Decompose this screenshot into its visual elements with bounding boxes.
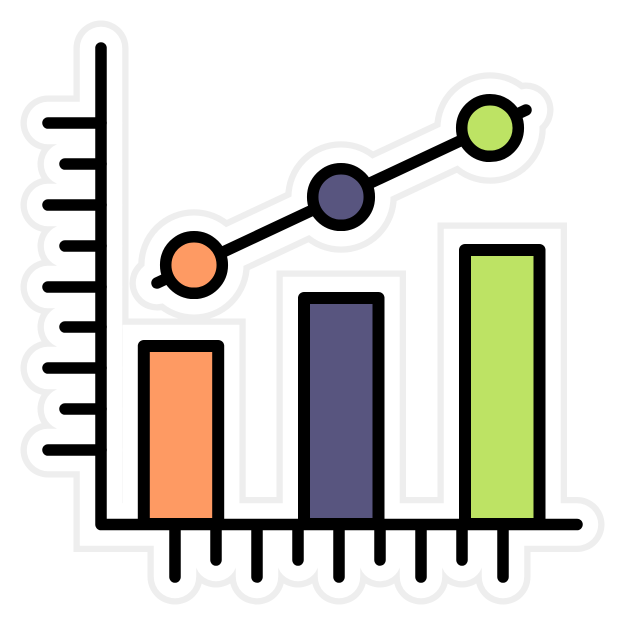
marker: orange (166, 237, 222, 293)
bar: purple (304, 298, 378, 524)
bar: green (465, 250, 540, 524)
bar: orange (144, 346, 218, 524)
axes with tick marks (48, 48, 577, 577)
trend line (157, 110, 526, 283)
marker: green (462, 100, 518, 156)
y axis ticks (48, 123, 101, 450)
bar chart (144, 250, 540, 524)
axis lines (101, 48, 577, 524)
marker: purple (313, 169, 369, 225)
trend line with markers (157, 100, 526, 293)
sticker outline (48, 48, 577, 577)
x axis ticks (175, 526, 503, 577)
